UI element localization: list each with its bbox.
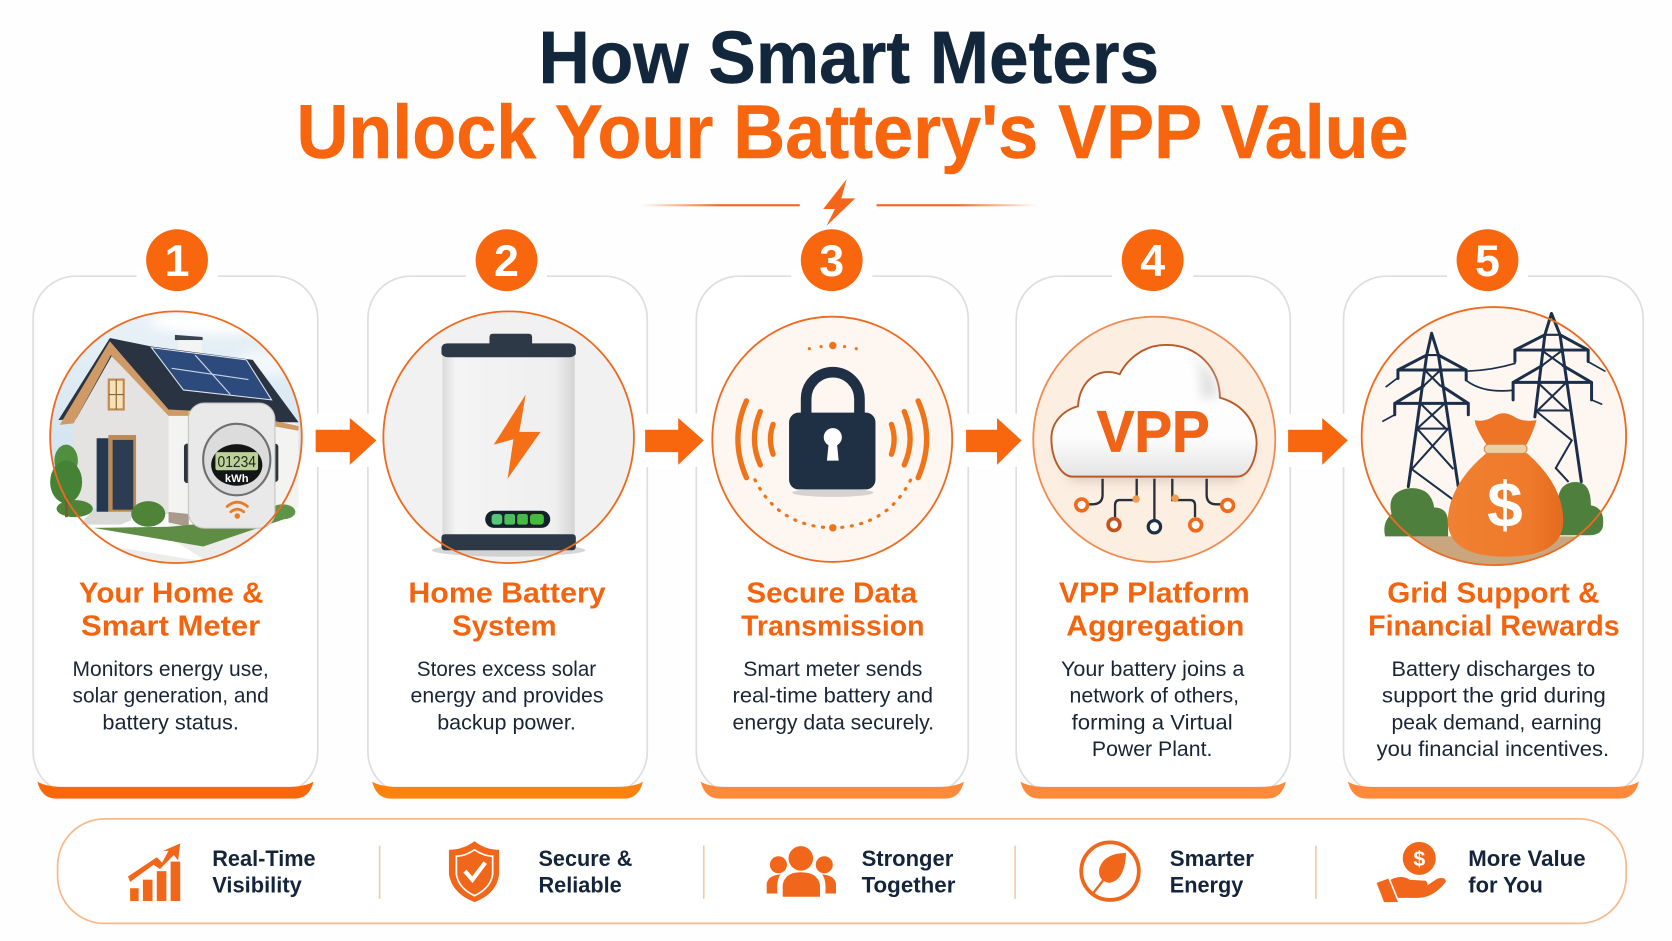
- step 4 heading: Aggregation: [1066, 611, 1244, 643]
- step 3 description: [733, 657, 934, 734]
- benefit: smarter energy: Energy: [1170, 872, 1244, 897]
- step 3 description: energy data securely.: [733, 710, 934, 734]
- panel: step 4 VPP platform aggregation: [1016, 229, 1290, 799]
- step 5 description: support the grid during: [1382, 684, 1606, 708]
- step 1 description: Monitors energy use,: [73, 657, 269, 681]
- icon: rising bar chart: [128, 843, 180, 901]
- illustration: house with solar panels and smart meter: 01234: [218, 454, 256, 471]
- step 4 description: forming a Virtual: [1072, 710, 1233, 734]
- illustration: VPP cloud with circuit nodes: [1033, 317, 1275, 562]
- arrow: step 3 to 4: [963, 414, 1025, 467]
- step 2 heading: System: [452, 611, 557, 643]
- step number 4: 4: [1140, 236, 1165, 286]
- benefit: smarter energy: Smarter: [1170, 846, 1254, 871]
- panel: step 1 home and smart meter: [33, 229, 318, 799]
- step 1 heading: [79, 577, 263, 643]
- step 4 heading: [1059, 577, 1250, 643]
- benefit: more value for you: for You: [1468, 872, 1543, 897]
- benefit: stronger together: [862, 846, 956, 897]
- step 5 description: peak demand, earning: [1392, 710, 1602, 734]
- title: [296, 15, 1409, 175]
- step 5 description: Battery discharges to: [1392, 657, 1595, 681]
- benefit: secure and reliable: Secure &: [539, 846, 632, 871]
- step number 4: [1122, 229, 1184, 291]
- step number 2: 2: [494, 236, 519, 286]
- benefit: stronger together: Stronger: [862, 846, 954, 871]
- step 4 description: Your battery joins a: [1061, 657, 1245, 681]
- step 4 heading: VPP Platform: [1059, 577, 1250, 609]
- step 1 description: battery status.: [102, 710, 239, 734]
- illustration: transmission towers and money bag: $: [1487, 469, 1523, 541]
- step 3 heading: Secure Data: [746, 577, 918, 609]
- step 5 heading: [1368, 577, 1620, 643]
- arrow: step 4 to 5: [1285, 414, 1349, 467]
- title: How Smart Meters: [539, 15, 1159, 99]
- benefit: smarter energy: [1170, 846, 1254, 897]
- benefit: more value for you: More Value: [1468, 846, 1586, 871]
- panel: step 2 home battery: [368, 229, 647, 799]
- step 2 heading: [408, 577, 606, 643]
- step 1 heading: Smart Meter: [81, 611, 260, 643]
- panel: benefits bar: [58, 819, 1626, 923]
- step 3 heading: Transmission: [741, 611, 925, 643]
- icon: group of people: [767, 846, 836, 897]
- benefit: real-time visibility: Visibility: [212, 872, 302, 897]
- illustration: VPP cloud with circuit nodes: VPP: [1097, 400, 1210, 465]
- step number 5: [1457, 229, 1518, 291]
- icon: shield with check: [449, 841, 499, 902]
- illustration: padlock with signal waves: [712, 317, 952, 562]
- arrow: step 1 to 2: [311, 414, 382, 467]
- step 3 description: Smart meter sends: [743, 657, 922, 681]
- benefit: secure and reliable: Reliable: [539, 872, 622, 897]
- illustration: house with solar panels and smart meter: [50, 310, 302, 567]
- step 1 description: [73, 657, 269, 734]
- step 4 description: [1061, 657, 1245, 761]
- step 2 description: Stores excess solar: [417, 657, 596, 681]
- illustration: house with solar panels and smart meter: kWh: [225, 473, 249, 485]
- benefit: secure and reliable: [539, 846, 632, 897]
- step number 5: 5: [1475, 236, 1500, 286]
- benefit: real-time visibility: Real-Time: [212, 846, 316, 871]
- step 3 heading: [741, 577, 925, 643]
- benefit: stronger together: Together: [862, 872, 956, 897]
- step 2 description: [411, 657, 604, 734]
- step 2 description: energy and provides: [411, 684, 604, 708]
- panel: step 3 secure data transmission: [696, 229, 968, 799]
- step 4 description: network of others,: [1070, 684, 1239, 708]
- step number 3: 3: [819, 236, 844, 286]
- icon: hand holding coin: [1377, 842, 1446, 902]
- step 5 description: you financial incentives.: [1377, 737, 1609, 761]
- icon: hand holding coin: $: [1413, 847, 1425, 871]
- benefit: more value for you: [1468, 846, 1586, 897]
- icon: title divider with lightning bolt: [640, 179, 1036, 226]
- step 2 heading: Home Battery: [408, 577, 606, 609]
- icon: leaf in circular arrows: [1081, 842, 1139, 900]
- step 1 description: solar generation, and: [73, 684, 269, 708]
- step 2 description: backup power.: [437, 710, 576, 734]
- step number 3: [801, 229, 863, 291]
- step number 2: [476, 229, 537, 291]
- benefit: real-time visibility: [212, 846, 316, 897]
- step 5 heading: Grid Support &: [1387, 577, 1599, 609]
- step number 1: [146, 229, 208, 291]
- step 1 heading: Your Home &: [79, 577, 263, 609]
- step 5 description: [1377, 657, 1609, 761]
- step 5 heading: Financial Rewards: [1368, 611, 1620, 643]
- illustration: transmission towers and money bag: [1362, 307, 1626, 570]
- step number 1: 1: [165, 236, 189, 286]
- panel: step 5 grid support and financial rewards: [1344, 229, 1643, 799]
- title: Unlock Your Battery's VPP Value: [296, 90, 1409, 175]
- step 3 description: real-time battery and: [733, 684, 933, 708]
- illustration: battery: [383, 311, 634, 563]
- step 4 description: Power Plant.: [1092, 737, 1212, 761]
- arrow: step 2 to 3: [642, 414, 706, 467]
